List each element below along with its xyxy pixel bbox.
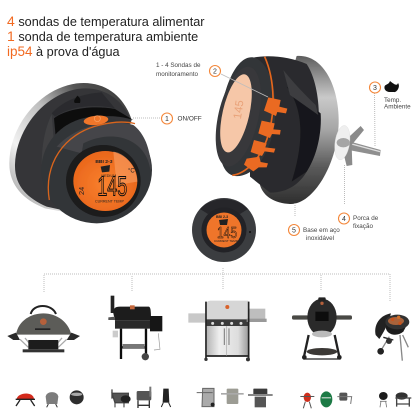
thermometer: small front view <box>192 198 256 262</box>
thermometer: small front view: CURRENT TEMP <box>214 239 238 243</box>
grill: kamado <box>292 297 352 360</box>
grill: pellet smoker <box>108 296 162 360</box>
washer <box>333 124 352 161</box>
thermometer: left large view <box>9 83 152 223</box>
recessed top slot <box>54 107 133 140</box>
orange band <box>232 57 273 175</box>
front ring <box>219 57 276 176</box>
raised top cover <box>52 92 115 117</box>
callout 1: ON/OFF: ON/OFF <box>178 116 202 122</box>
small grill: green egg <box>320 391 332 407</box>
LCD screen: 24 <box>77 187 86 195</box>
callout 5: stainless base: inoxidável <box>306 235 334 242</box>
stainless flange <box>260 56 339 204</box>
dashed connector to grills <box>44 268 390 302</box>
LCD screen <box>73 151 137 211</box>
thermometer: right side view: 145 <box>232 99 246 120</box>
small grill: mini kettle <box>70 390 84 404</box>
grill: electric dome <box>7 306 80 352</box>
callout 4: fixing nut: fixação <box>353 223 373 230</box>
small grill: barrel <box>137 391 151 400</box>
small grills row <box>16 387 171 408</box>
icon: flame <box>384 81 399 92</box>
small grill: offset smoker <box>112 389 128 403</box>
small grill: weber genesis <box>253 389 267 396</box>
small grill: kettle small <box>379 392 388 400</box>
dark body <box>250 56 319 193</box>
small grill: vertical smoker <box>163 389 169 403</box>
LCD screen: MEDIUM <box>101 174 116 178</box>
LCD screen: BBI 2-3 <box>95 159 113 165</box>
callout 2: probes <box>210 66 268 97</box>
callout 1: ON/OFF <box>133 113 202 124</box>
LCD screen: CURRENT TEMP <box>95 199 124 203</box>
back silver rim <box>9 83 132 218</box>
screen bezel <box>66 145 141 217</box>
headline: features: 4 sondas de temperatura alimentar <box>7 13 205 29</box>
thermometer: small front view: 145 <box>217 225 237 242</box>
callout 3: ambient temperature: Temp. <box>384 97 401 104</box>
callout 5: stainless base <box>288 203 340 242</box>
callout 1: ON/OFF: 1 <box>165 116 169 123</box>
small grill: steel table <box>227 389 238 404</box>
small grill: kettle cart <box>396 392 408 400</box>
callout 3: ambient temperature: Ambiente <box>384 104 411 110</box>
small grill: red kamado <box>304 393 311 402</box>
callout: probes label: 1 - 4 Sondas de <box>156 62 201 69</box>
power button <box>83 114 109 126</box>
callout 4: fixing nut: Porca de <box>353 215 379 222</box>
callout 4: fixing nut: 4 <box>342 216 346 223</box>
front body <box>41 117 152 223</box>
callout 5: stainless base: 5 <box>292 228 296 234</box>
callout 5: stainless base: Base em aço <box>303 227 340 234</box>
headline: features: 1 sonda de temperatura ambiente <box>7 28 198 44</box>
small grill: drum <box>46 392 58 404</box>
callout: probes label: monitoramento <box>156 71 198 78</box>
callout 4: fixing nut <box>338 165 379 230</box>
callout 2: probes: 2 <box>213 68 217 76</box>
small grill: red portable <box>17 393 34 399</box>
grill: stainless gas <box>188 301 267 361</box>
thermometer: small front view: BBI 2-3 <box>216 215 228 219</box>
orange probe ports <box>244 97 287 171</box>
shaft <box>335 137 381 156</box>
thermometer: right side view <box>207 56 381 204</box>
grill: kettle <box>375 313 409 361</box>
small grill: gas cart <box>197 388 214 407</box>
callout 3: ambient temperature <box>370 81 411 146</box>
dark rear housing <box>15 88 131 218</box>
headline: features <box>7 13 205 59</box>
screen washed out <box>214 71 258 155</box>
small grill: black kamado <box>339 393 347 401</box>
front bezel <box>207 62 269 171</box>
callout 3: ambient temperature: 3 <box>373 85 377 92</box>
LCD screen: 145 <box>97 171 127 202</box>
icon: flame on housing <box>74 96 81 103</box>
callout: probes label <box>156 62 201 78</box>
orange line <box>48 122 135 200</box>
LCD screen: °C <box>128 168 135 174</box>
wing nut <box>343 126 364 166</box>
headline: features: ip54 à prova d'água <box>7 44 121 59</box>
